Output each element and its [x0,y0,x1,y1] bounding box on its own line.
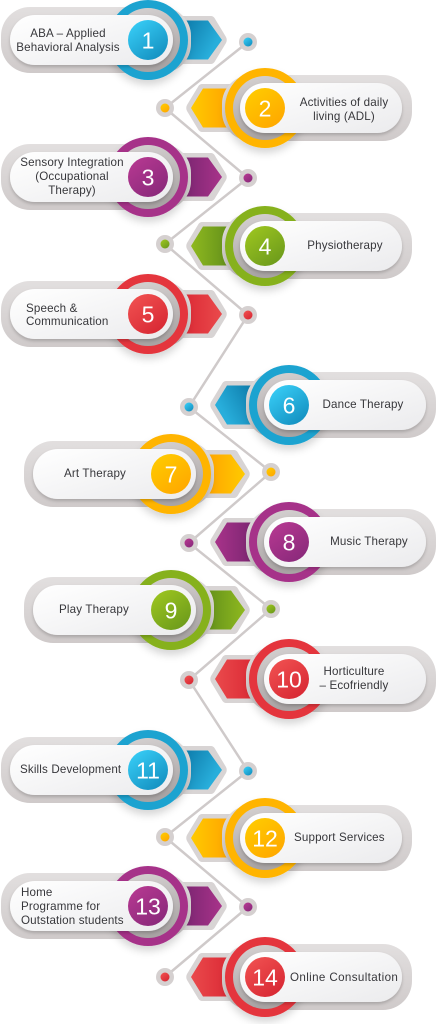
item 4: Physiotherapy: 4 [259,234,272,260]
item 3: Sensory Integration [1,137,227,217]
item 5: Speech and Communication: Speech & [26,302,78,315]
item 8: Music Therapy: 8 [283,530,295,556]
item 6: Dance Therapy: 6 [283,392,295,418]
item 13: Home Programme: Programme for [21,900,100,913]
item 13: Home Programme: 13 [135,894,161,920]
connector line [165,42,271,977]
connector nodes [156,33,280,986]
item 12: Support Services [186,798,412,878]
item 1: ABA [1,0,227,80]
item 11: Skills Development: 11 [136,758,160,784]
item 2: Activities of daily living [186,68,412,148]
item 7: Art Therapy: Art Therapy [64,467,126,480]
item 10: Horticulture: – Ecofriendly [320,679,389,692]
item 12: Support Services: 12 [252,826,278,852]
item 3: Sensory Integration: Sensory Integration [20,156,124,169]
item 13: Home Programme: Outstation students [21,914,124,927]
item 6: Dance Therapy: Dance Therapy [322,398,404,411]
item 5: Speech and Communication: 5 [142,302,154,328]
item 2: Activities of daily living: living (ADL) [313,110,375,123]
item 5: Speech and Communication: Communication [26,315,108,328]
item 2: Activities of daily living: 2 [259,96,271,122]
item 1: ABA: Behavioral Analysis [16,41,120,54]
item 3: Sensory Integration: 3 [142,164,154,190]
item 4: Physiotherapy: Physiotherapy [307,239,383,252]
item 3: Sensory Integration: Therapy) [48,184,96,197]
item 11: Skills Development: Skills Development [20,763,122,776]
item 11: Skills Development [1,730,227,810]
item 13: Home Programme: Home [21,886,53,899]
item 13: Home Programme [1,866,227,946]
item 3: Sensory Integration: (Occupational [35,170,109,183]
item 1: ABA: ABA – Applied [30,27,106,40]
item 5: Speech and Communication [1,274,227,354]
item 14: Online Consultation: Online Consultation [290,971,398,984]
item 8: Music Therapy: Music Therapy [330,535,408,548]
item 8: Music Therapy [210,502,436,582]
item 6: Dance Therapy [210,365,436,445]
item 7: Art Therapy: 7 [165,462,177,488]
item 7: Art Therapy [24,434,250,514]
item 14: Online Consultation [186,937,412,1017]
item 9: Play Therapy: 9 [165,598,177,624]
item 10: Horticulture: 10 [276,666,302,692]
item 12: Support Services: Support Services [294,831,385,844]
item 9: Play Therapy: Play Therapy [59,603,129,616]
item 10: Horticulture [210,639,436,719]
item 9: Play Therapy [24,570,250,650]
item 10: Horticulture: Horticulture [323,665,385,678]
item 14: Online Consultation: 14 [252,964,278,990]
item 4: Physiotherapy [186,206,412,286]
item 1: ABA: 1 [142,28,154,54]
item 2: Activities of daily living: Activities of daily [300,96,388,109]
